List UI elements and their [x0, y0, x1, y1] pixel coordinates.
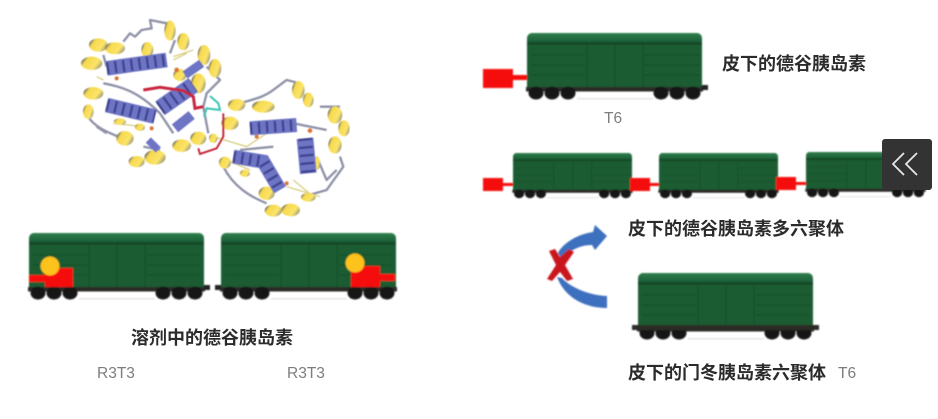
train car: hexamer 2: [630, 153, 779, 198]
grey backbone loops: [88, 20, 343, 203]
panel: solution R3T3 dimer: [28, 233, 397, 300]
label: T6: T6: [604, 110, 622, 127]
label: R3T3 left: R3T3: [97, 365, 135, 382]
train car: right R3T3: [220, 233, 397, 300]
video overlay button: [882, 139, 932, 190]
coupler: [204, 285, 221, 290]
heading: multi-hexamer: 皮下的德谷胰岛素多六聚体: [628, 218, 844, 239]
label: R3T3 right: R3T3: [287, 365, 325, 382]
train car: left R3T3: [28, 233, 205, 300]
train car: aspart hexamer: [632, 273, 819, 340]
yellow helices: [81, 21, 350, 217]
train car: hexamer 1: [483, 153, 633, 198]
red and cyan chains: [143, 87, 203, 108]
heading: subcutaneous insulin degludec: 皮下的德谷胰岛素: [722, 53, 866, 74]
panel: subcutaneous T6: [483, 33, 708, 100]
protein structure illustration: [81, 20, 350, 217]
icon: blocked curved arrow: [547, 225, 607, 308]
panel: multi-hexamer chain: [483, 152, 926, 198]
blue helices: [107, 60, 308, 190]
heading: subcutaneous insulin aspart hexamer: 皮下的门冬胰岛素六聚体: [628, 362, 826, 383]
label: T6 aspart: T6: [838, 365, 856, 382]
panel: insulin aspart hexamer: [632, 273, 819, 340]
train car: T6 with red side chain: [483, 33, 708, 100]
heading: insulin degludec in solvent: 溶剂中的德谷胰岛素: [131, 327, 293, 348]
train car: hexamer 3: [776, 152, 926, 197]
